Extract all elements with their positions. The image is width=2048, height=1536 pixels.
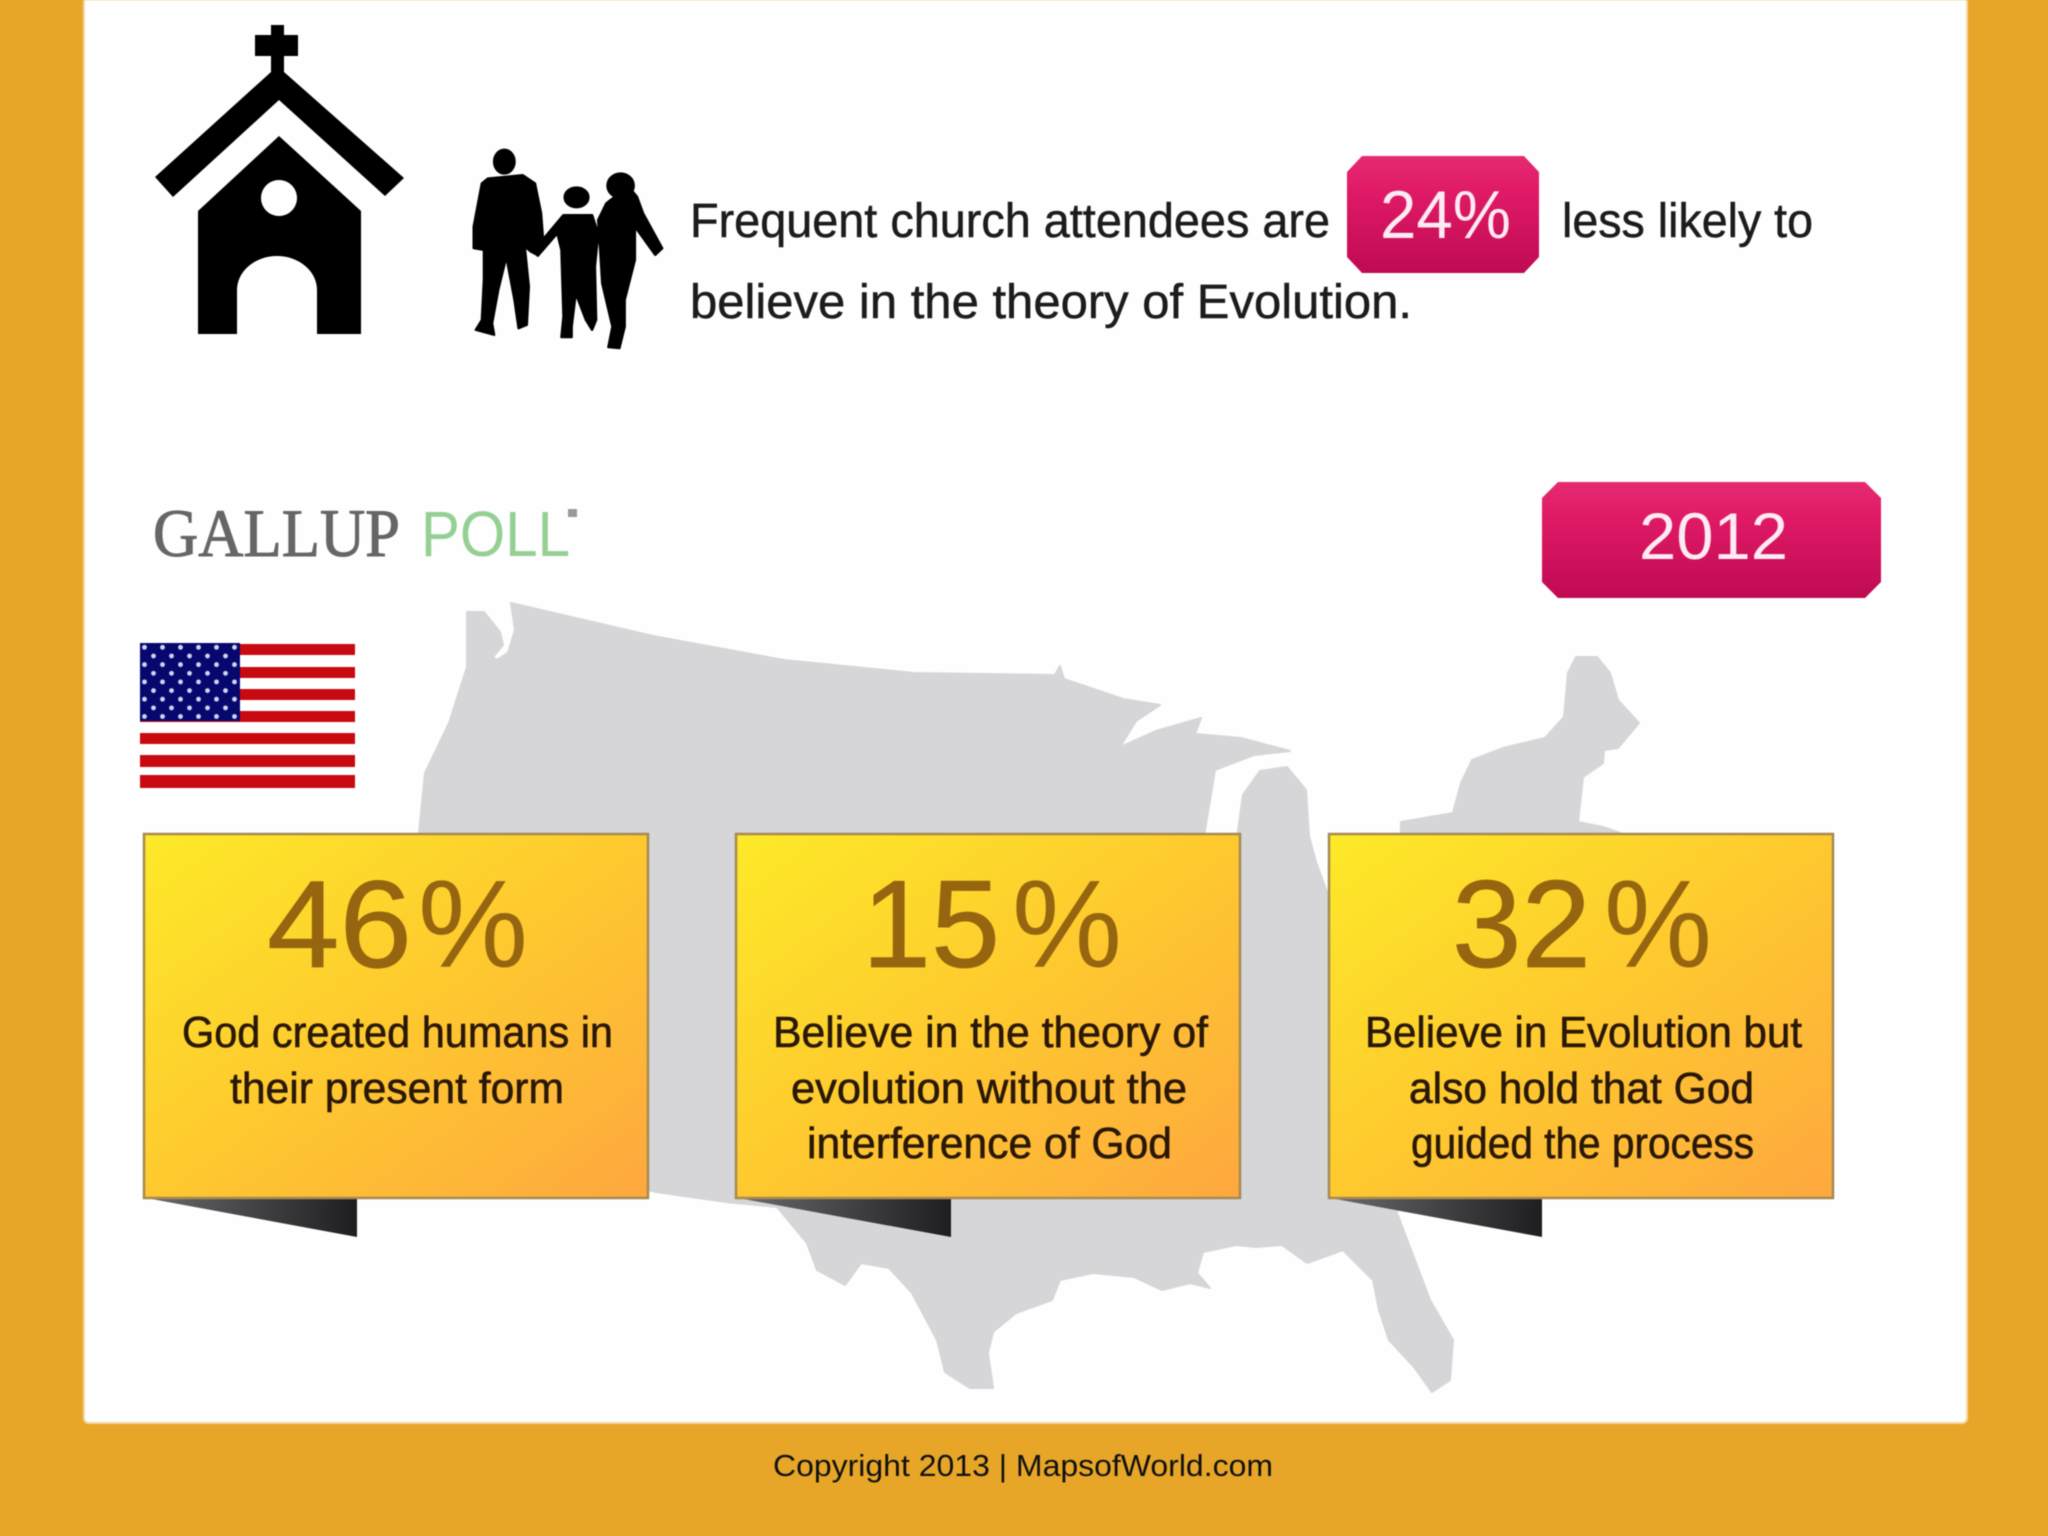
panel: 46% creationism (144, 834, 648, 1237)
logo: Gallup Poll: POLL (421, 498, 570, 570)
stat: % (1012, 856, 1122, 994)
description: Believe in the theory of (773, 1008, 1209, 1057)
description: interference of God (807, 1119, 1172, 1168)
headline text (690, 195, 1813, 329)
badge: 24%: 24% (1380, 177, 1511, 253)
stat: % (1604, 856, 1712, 994)
card (1329, 834, 1833, 1198)
description (1365, 1008, 1802, 1168)
stat (1452, 856, 1712, 994)
logo: Gallup Poll: GALLUP (153, 495, 400, 571)
description (773, 1008, 1209, 1168)
description (182, 1008, 613, 1113)
icon: church (155, 25, 404, 334)
description: their present form (230, 1064, 564, 1113)
icon: family silhouette (474, 150, 662, 348)
description: God created humans in (182, 1008, 613, 1057)
logo: Gallup Poll (153, 495, 577, 571)
description: also hold that God (1409, 1064, 1754, 1113)
panel: 32% God-guided evolution (1329, 834, 1833, 1237)
description: guided the process (1411, 1119, 1754, 1168)
panel: 15% evolution without God (736, 834, 1240, 1237)
card (144, 834, 648, 1198)
description: evolution without the (791, 1064, 1187, 1113)
stat: 15 (862, 856, 1000, 994)
badge: 2012: 2012 (1639, 499, 1788, 573)
ribbon fold (1330, 1198, 1542, 1237)
stat: 32 (1452, 856, 1591, 994)
copyright footer: Copyright 2013 | MapsofWorld.com (773, 1448, 1273, 1483)
card (736, 834, 1240, 1198)
map of the United States (419, 603, 1640, 1392)
stat: 46 (267, 856, 412, 994)
stat (862, 856, 1122, 994)
ribbon fold (146, 1198, 357, 1237)
stat: % (418, 856, 528, 994)
headline text: Frequent church attendees are (690, 195, 1330, 248)
stat (267, 856, 528, 994)
headline text: less likely to (1562, 195, 1813, 248)
badge: 2012 (1542, 482, 1881, 598)
badge: 24% (1347, 156, 1539, 273)
headline text: believe in the theory of Evolution. (690, 276, 1412, 329)
icon: US flag (140, 643, 355, 788)
ribbon fold (738, 1198, 951, 1237)
description: Believe in Evolution but (1365, 1008, 1802, 1057)
